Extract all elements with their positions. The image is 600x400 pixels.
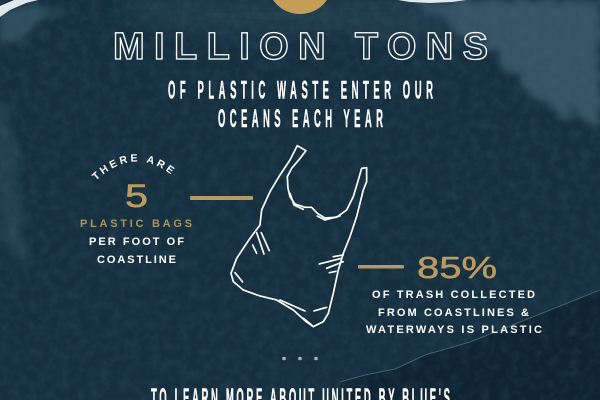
number 85%: 85% <box>417 250 497 285</box>
caption line 2: FROM COASTLINES & <box>378 307 529 319</box>
caption line 1: OF TRASH COLLECTED <box>372 289 535 301</box>
subheading line 2: OCEANS EACH YEAR <box>218 105 383 132</box>
connector line left <box>190 196 253 200</box>
icon: plastic bag outline <box>231 146 367 327</box>
label: per foot of: PER FOOT OF <box>89 236 184 248</box>
heading: million tons: MILLION TONS <box>113 26 488 68</box>
subheading <box>168 76 433 132</box>
caption line 3: WATERWAYS IS PLASTIC <box>366 324 542 336</box>
number 5: 5 <box>125 178 148 214</box>
stat: 5 plastic bags <box>80 154 192 266</box>
stat: 85% <box>366 250 542 336</box>
divider dots <box>282 357 318 360</box>
arc text: there are <box>96 162 179 181</box>
label: coastline: COASTLINE <box>97 254 176 266</box>
stat: 5 plastic bags: THERE ARE <box>91 154 175 180</box>
label: plastic bags: PLASTIC BAGS <box>80 218 192 230</box>
icon: white brush stroke left <box>0 0 38 17</box>
icon: gold circle <box>267 0 333 14</box>
subheading line 1: OF PLASTIC WASTE ENTER OUR <box>168 76 433 104</box>
icon: white brush stroke right <box>398 0 466 3</box>
connector line right <box>358 265 404 268</box>
